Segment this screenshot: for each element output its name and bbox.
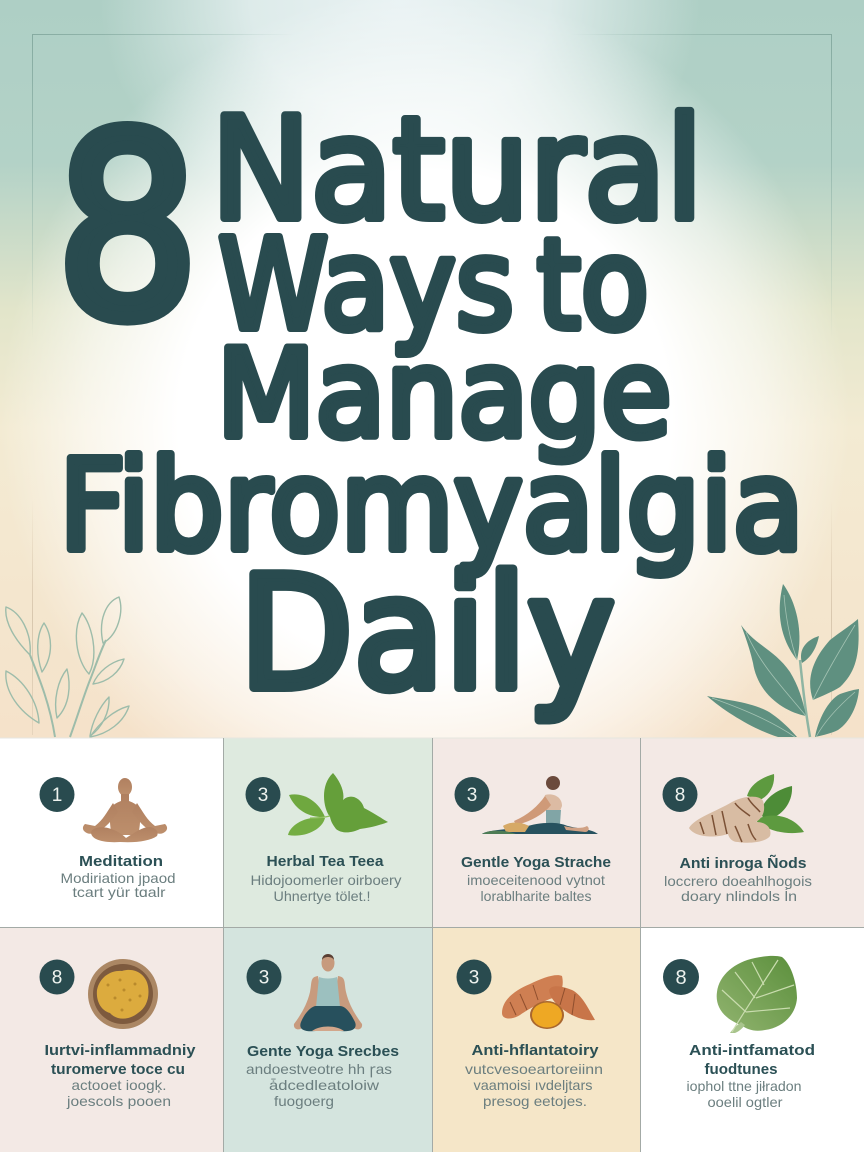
heading: Anti-intfamatod — [689, 1042, 815, 1059]
panel 5: turmeric bowl — [0, 928, 223, 1152]
description — [60, 870, 176, 900]
description: actooet ioogķ. — [72, 1077, 166, 1093]
background: title area gradient — [0, 0, 864, 738]
heading: Gente Yoga Srecbes — [247, 1043, 399, 1060]
grid of eight tips — [0, 738, 864, 1152]
panel 1: Meditation — [0, 738, 223, 928]
icon: green leaf — [717, 956, 797, 1033]
panel 4: Anti-inflammatory foods — [640, 738, 864, 928]
description: ooelil ogtler — [708, 1094, 783, 1110]
icon: yoga side stretch — [482, 776, 598, 834]
number badge 4 — [662, 777, 698, 812]
description — [467, 872, 605, 904]
title line: Manage: Manage — [217, 324, 672, 465]
number badge 1 — [40, 777, 74, 812]
heading line 2: turomerve toce cu — [51, 1061, 185, 1078]
description — [246, 1061, 392, 1109]
description: vutcvesoeartoreiinn — [465, 1061, 603, 1077]
description — [250, 872, 402, 904]
heading: Herbal Tea Teea — [266, 853, 384, 870]
description: vaamoisi ıvdeljtars — [474, 1077, 592, 1093]
description — [465, 1061, 603, 1109]
number badge 5: 8 — [52, 968, 62, 988]
number badge 8: 8 — [675, 967, 687, 989]
number badge 7 — [456, 960, 492, 994]
icon: turmeric roots — [502, 975, 595, 1029]
description: Modiriation jpaod — [60, 870, 176, 886]
description: doary nlindols ĺn — [681, 887, 797, 904]
description: Uhnertye tölet.! — [274, 888, 370, 904]
illustration: outlined plant, bottom left — [6, 597, 129, 737]
description: fuogoerg — [274, 1093, 334, 1109]
description: andoestveotre hh ꞅas — [246, 1061, 392, 1078]
number badge 6 — [246, 960, 282, 994]
number badge 6: 3 — [259, 968, 269, 988]
description: lorablharite baltes — [480, 888, 592, 904]
heading: Iurtvi-inflammadniy — [44, 1042, 196, 1059]
description: iophol ttne jiłradon — [686, 1078, 802, 1094]
number badge 2: 3 — [258, 785, 268, 806]
number badge 2 — [246, 777, 280, 812]
number badge 3: 3 — [467, 785, 477, 806]
number badge 7: 3 — [469, 968, 479, 988]
grid lines — [0, 738, 864, 1152]
number badge 4: 8 — [675, 785, 685, 806]
description — [66, 1077, 171, 1109]
illustration: solid green leaves, bottom right — [707, 584, 859, 737]
description: Hidojoomerler oirboery — [250, 872, 402, 888]
panel 2: Herbal Tea — [223, 738, 432, 928]
description: imoeceitenood vytnot — [467, 872, 605, 888]
heading: Anti-hflantatoiry — [472, 1042, 599, 1059]
description: loccrero doeahlhogois — [664, 873, 812, 889]
description: joescols pooen — [66, 1093, 171, 1109]
description: presog eetojes. — [483, 1093, 587, 1109]
title — [56, 82, 804, 724]
icon: bowl of turmeric — [88, 959, 158, 1029]
panel 6: Gentle Yoga Stretches — [223, 928, 432, 1152]
number badge 1: 1 — [52, 785, 62, 806]
title line: Fibromyalgia: Fibromyalgia — [59, 434, 804, 579]
heading line 2: fuodtunes — [704, 1061, 778, 1078]
number badge 5 — [40, 960, 74, 994]
title numeral 8: 8 — [56, 82, 199, 375]
title line: Natural: Natural — [211, 88, 703, 252]
icon: meditating figure — [83, 778, 167, 842]
icon: herb leaves — [288, 773, 388, 836]
description: tcart yür tɑalr — [72, 884, 166, 900]
description — [686, 1078, 802, 1110]
icon: ginger root with leaves — [689, 774, 804, 843]
description: ǡdcedleatoloiw — [269, 1077, 380, 1093]
heading: Gentle Yoga Strache — [461, 854, 611, 871]
heading: Anti inroga Ñods — [680, 854, 806, 872]
title line: Daily: Daily — [239, 542, 615, 724]
icon: seated yoga figure — [294, 954, 362, 1031]
panel 7: Anti-inflammatory turmeric — [432, 928, 640, 1152]
panel 3: Gentle Yoga Stretch — [432, 738, 640, 928]
title line: Ways to: Ways to — [218, 213, 649, 358]
description — [664, 873, 812, 904]
number badge 3 — [454, 777, 490, 812]
decorative frame — [32, 34, 832, 735]
number badge 8 — [663, 959, 699, 995]
heading: Meditation — [79, 853, 163, 870]
panel 8: Anti-inflammatory foods leaf — [640, 928, 864, 1152]
